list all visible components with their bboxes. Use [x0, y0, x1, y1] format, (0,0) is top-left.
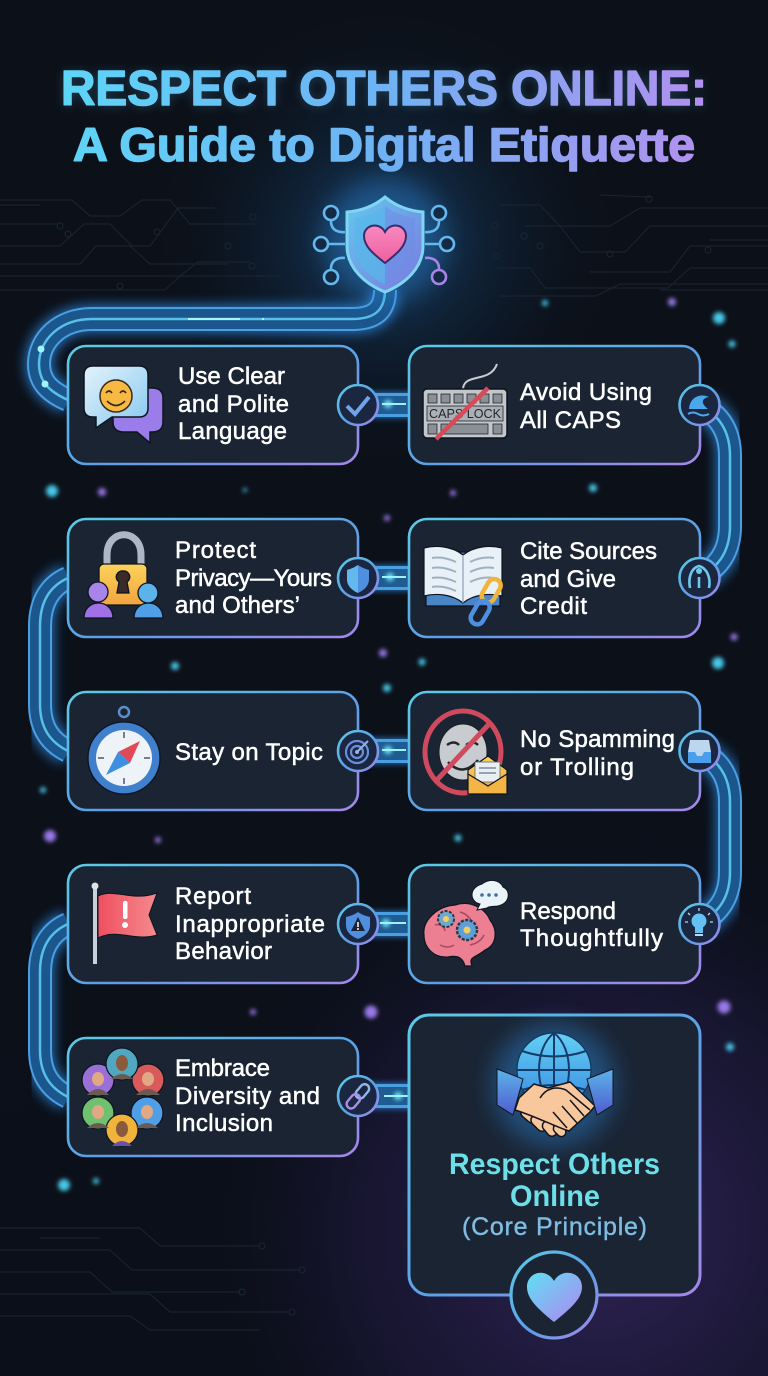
- node: target: [338, 731, 378, 771]
- panel: Respond Thoughtfully: [409, 865, 700, 983]
- node: warning shield: [338, 904, 378, 944]
- icon: red warning flag: [92, 882, 157, 964]
- icon: compass: [88, 707, 160, 794]
- text: Use Clear and Polite Language: Use Clear: [178, 363, 285, 390]
- heading: Respect Others Online: Online: [510, 1180, 600, 1213]
- text: Embrace Diversity and Inclusion: Inclusion: [175, 1110, 273, 1137]
- text: No Spamming or Trolling: [520, 726, 675, 781]
- icon: globe and handshake: [492, 1023, 616, 1147]
- connector path: shield to first step: [38, 290, 385, 400]
- panel: Use Clear and Polite Language: [68, 346, 358, 464]
- text: Protect Privacy-Yours and Others': Protect: [175, 537, 256, 564]
- text: Respond Thoughtfully: Respond: [520, 898, 616, 925]
- text: Cite Sources and Give Credit: Cite Sources: [520, 538, 657, 565]
- node: checkmark: [338, 385, 378, 425]
- text: Embrace Diversity and Inclusion: Diversity and: [175, 1083, 320, 1110]
- node: shield: [338, 558, 378, 598]
- panel: Protect Privacy: [68, 519, 358, 637]
- icon: open book with chain link: [424, 546, 503, 627]
- text: Embrace Diversity and Inclusion: [175, 1055, 320, 1137]
- connector path: right bend, row 1 to row 2: [699, 405, 730, 578]
- node: light bulb: [680, 904, 720, 944]
- heading: Respect Others Online: Respect Others: [449, 1148, 660, 1181]
- text: Use Clear and Polite Language: and Polite: [178, 391, 289, 418]
- text: Cite Sources and Give Credit: and Give: [520, 566, 616, 593]
- panel: core principle: [409, 1015, 700, 1338]
- icon: chat bubbles with smiley: [84, 366, 163, 443]
- title: [61, 62, 707, 171]
- icon: prohibited troll face and envelope: [425, 711, 507, 794]
- connector path: right bend, row 3 to row 4: [699, 751, 730, 924]
- text: Avoid Using All CAPS: All CAPS: [520, 407, 621, 434]
- node: info: [680, 558, 720, 598]
- panel: Stay on Topic: [68, 692, 358, 810]
- text: Respond Thoughtfully: [520, 898, 663, 952]
- text: Avoid Using All CAPS: Avoid Using: [520, 379, 652, 406]
- text: Cite Sources and Give Credit: [520, 538, 657, 620]
- panel: Report Inappropriate Behavior: [68, 865, 358, 983]
- icon: ring of diverse people: [82, 1048, 164, 1146]
- text: No Spamming or Trolling: No Spamming: [520, 726, 675, 753]
- text: Cite Sources and Give Credit: Credit: [520, 593, 587, 620]
- glowing particles: [40, 298, 738, 1191]
- panel: Embrace Diversity and Inclusion: [68, 1038, 358, 1156]
- text: Use Clear and Polite Language: Language: [178, 418, 287, 445]
- heading: Respect Others Online: [449, 1148, 660, 1213]
- icon: padlock with two people: [84, 535, 163, 618]
- title: RESPECT OTHERS ONLINE:: [61, 62, 707, 116]
- text: Report Inappropriate Behavior: Behavior: [175, 938, 272, 965]
- node: chain link: [338, 1076, 378, 1116]
- title: RESPECT OTHERS ONLINE:: [61, 63, 707, 117]
- text: Report Inappropriate Behavior: Report: [175, 883, 251, 910]
- connector path: left bend, row 2 to row 3: [40, 578, 68, 751]
- icon: brain with gears and speech bubble: [424, 880, 508, 966]
- icon: crossed-out keyboard: [423, 364, 507, 439]
- text: Avoid Using All CAPS: [520, 379, 652, 434]
- text: Report Inappropriate Behavior: [175, 883, 325, 965]
- text: Protect Privacy-Yours and Others': Privacy—Yours: [175, 565, 332, 592]
- icon: heart badge: [511, 1252, 597, 1338]
- connector path: left bend, row 4 to row 5: [40, 924, 68, 1097]
- text: Report Inappropriate Behavior: Inappropriate: [175, 911, 325, 938]
- text: Stay on Topic: Stay on Topic: [175, 739, 323, 766]
- text: Protect Privacy-Yours and Others': and Others’: [175, 592, 300, 619]
- text: Embrace Diversity and Inclusion: Embrace: [175, 1055, 270, 1082]
- text: No Spamming or Trolling: or Trolling: [520, 754, 634, 781]
- text: Respond Thoughtfully: Thoughtfully: [520, 925, 663, 952]
- text: Protect Privacy-Yours and Others': [175, 537, 332, 619]
- panel: No Spamming or Trolling: [409, 692, 700, 810]
- text: (Core Principle): (Core Principle): [462, 1213, 647, 1241]
- text: Use Clear and Polite Language: [178, 363, 289, 445]
- title: A Guide to Digital Etiquette: [73, 118, 695, 171]
- icon: shield with heart and circuit nodes: [314, 178, 454, 302]
- node: inbox: [680, 731, 720, 771]
- node: wave: [680, 385, 720, 425]
- icon: crossed-out keyboard: CAPS LOCK: [429, 406, 501, 421]
- panel: Cite Sources and Give Credit: [409, 519, 700, 637]
- horizontal connectors between cards: [358, 392, 410, 1109]
- panel: Avoid Using All CAPS: [409, 346, 700, 464]
